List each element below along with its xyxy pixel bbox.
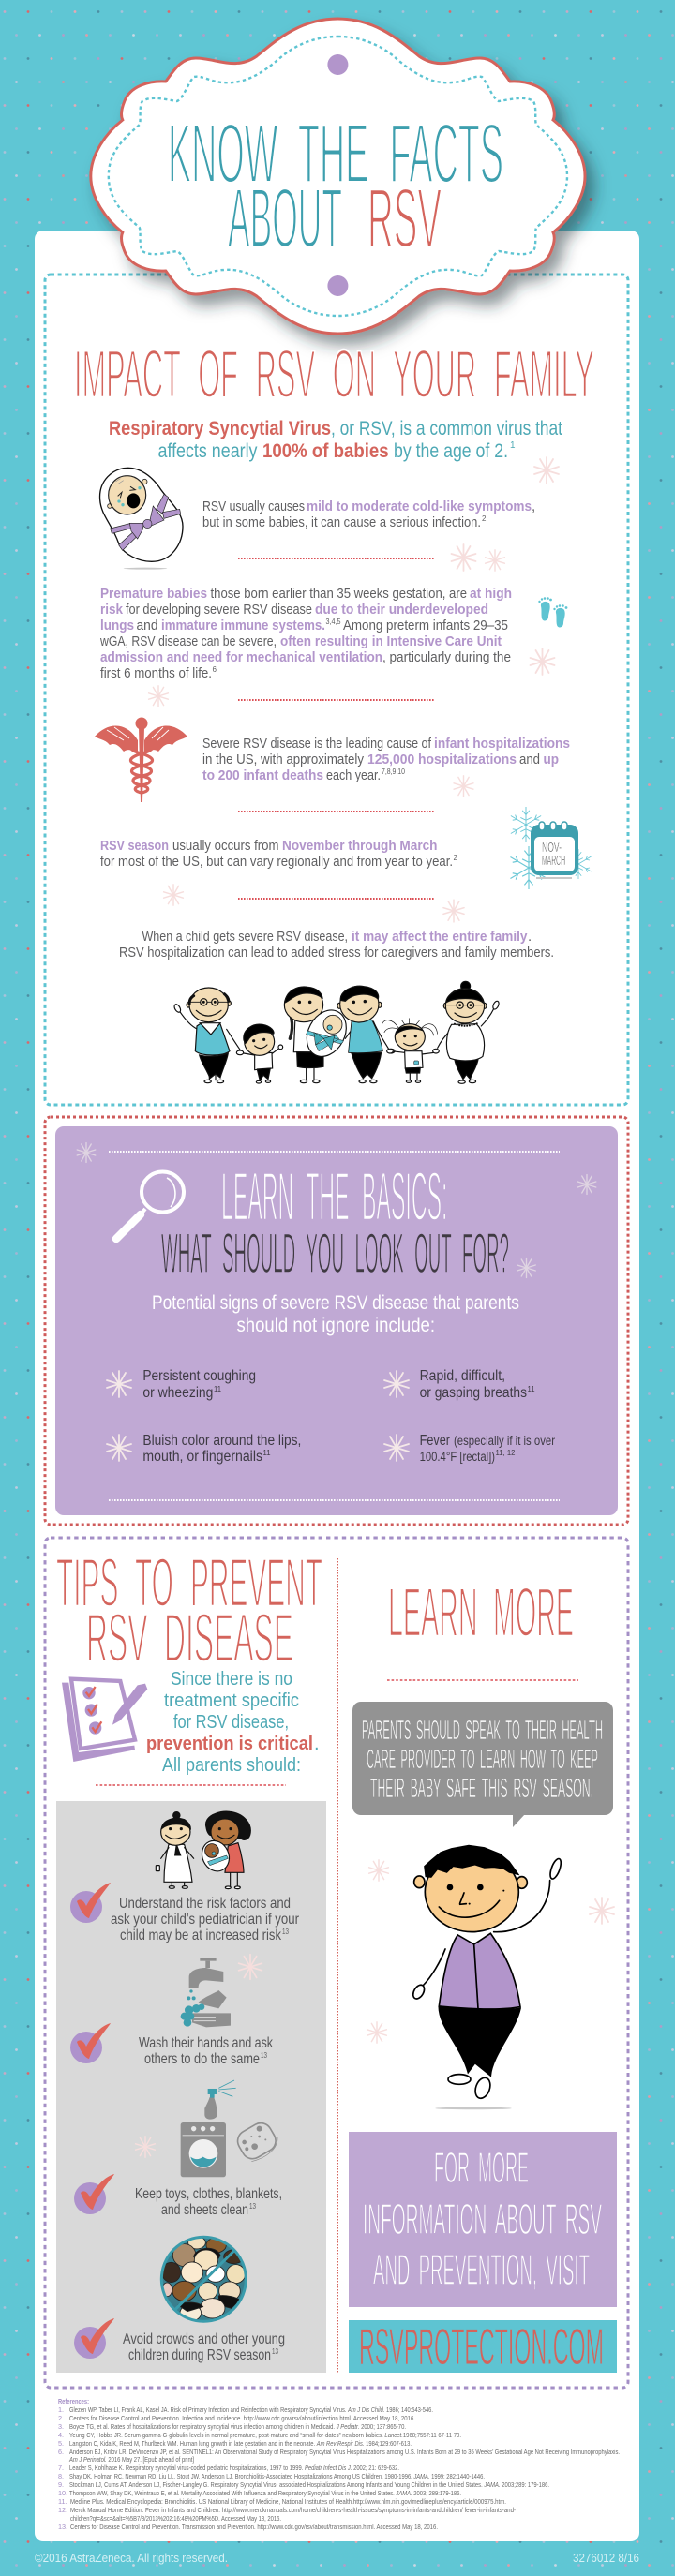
text: wash hands: Wash their hands and ask <box>139 2035 274 2051</box>
text: understand risk factors: 13 <box>282 1928 289 1936</box>
references: Shay DK, Holman RC, Newman RD, Liu LL, Stout JW, Anderson LJ. Bronchiolitis-Associated Hospitalizations Among US Children, 1980-1996. JAMA. 1999; 282:1440-1446. <box>69 2472 485 2480</box>
text: infant hospitalizations: Severe RSV disease is the leading cause of <box>202 736 432 752</box>
list of warning signs <box>107 1368 555 1465</box>
text: potential signs: should not ignore include: <box>236 1315 435 1336</box>
text: premature babies: Among preterm infants 29–35 <box>343 618 508 633</box>
text: affects the entire family: . <box>528 929 532 945</box>
text: premature babies: immature immune systems. <box>161 618 325 633</box>
grandmother <box>438 981 500 1083</box>
list of warning signs: 11 <box>214 1385 222 1393</box>
footer: job code: 3276012 8/16 <box>573 2551 639 2565</box>
references: 13. <box>58 2523 68 2531</box>
icon: winter calendar: MARCH <box>542 853 565 869</box>
references: Am J Perinatol. 2016 May 27. [Epub ahead of print] <box>68 2455 194 2464</box>
text: avoid crowds: Avoid crowds and other young <box>123 2331 285 2347</box>
text: prevention is critical: All parents should: <box>162 1755 301 1776</box>
references: 6. <box>58 2448 64 2456</box>
references: Stockman LJ, Curns AT, Anderson LJ, Fischer-Langley G. Respiratory Syncytial Virus- associated Hospitalizations Among Infants and Young Children in the United States. JAMA. 2003;289: 179-186. <box>69 2480 549 2489</box>
text: premature babies: risk <box>100 602 124 618</box>
list of warning signs: or gasping breaths <box>420 1385 527 1401</box>
text: premature babies: admission and need for mechanical ventilation <box>100 649 382 665</box>
list of warning signs: 100.4°F [rectal]) <box>420 1450 495 1464</box>
icon: checklist and pencil <box>62 1679 147 1762</box>
references: 4. <box>58 2431 64 2439</box>
list of warning signs: mouth, or fingernails <box>142 1449 262 1465</box>
text: keep clean: and sheets clean <box>161 2202 248 2218</box>
text: affects the entire family: it may affect the entire family <box>352 929 528 945</box>
text: premature babies: 6 <box>212 665 218 674</box>
references: Merck Manual Home Edition. Fever in Infants and Children. http://www.merckmanuals.com/home/children-s-health-issues/symptoms-in-infants-andchildren/ fever-in-infants-and- <box>70 2506 516 2514</box>
title: ABOUT <box>228 172 342 266</box>
text: RSV season: November through March <box>282 838 437 854</box>
text: wash hands: 13 <box>261 2051 267 2060</box>
family baby <box>299 1004 354 1064</box>
text: infant hospitalizations <box>202 736 570 783</box>
intro text: Respiratory Syncytial Virus <box>109 418 331 439</box>
mother <box>284 987 325 1083</box>
list of warning signs: 11 <box>527 1385 535 1393</box>
text: premature babies: 3,4,5 <box>326 618 341 626</box>
boy <box>236 1024 283 1083</box>
references: Yeung CY, Hobbs JR. Serum-gamma-G-globulin levels in normal premature, post-mature and “small-for-dates” newborn babies. Lancet.1968;7557:11 67-11 70. <box>69 2431 461 2439</box>
text: mild to moderate symptoms: 2 <box>482 514 487 523</box>
text: premature babies: those born earlier than 35 weeks gestation, are <box>210 586 467 602</box>
icon: crossed-out crowd <box>161 2237 246 2321</box>
references <box>58 2397 620 2531</box>
text: wash hands <box>139 2035 274 2067</box>
footer: copyright: ©2016 AstraZeneca. All rights reserved. <box>35 2551 228 2565</box>
list of warning signs: Rapid, difficult, <box>420 1368 505 1384</box>
title: RSV <box>368 172 442 266</box>
text: premature babies: Premature babies <box>100 586 207 602</box>
references: 7. <box>58 2464 64 2472</box>
text: keep clean: 13 <box>249 2202 256 2211</box>
intro text: affects nearly <box>158 440 258 462</box>
list of warning signs: 11, 12 <box>495 1449 516 1457</box>
girl <box>382 1019 439 1082</box>
divider <box>238 558 434 559</box>
panel: learn the basics dashed frame <box>45 1117 628 1525</box>
intro text: by the age of 2. <box>394 440 508 462</box>
panel: impact dashed frame <box>45 275 628 1105</box>
list of warning signs: (especially if it is over <box>454 1434 555 1448</box>
text: prevention is critical: . <box>314 1734 320 1754</box>
text: mild to moderate symptoms: but in some babies, it can cause a serious infection. <box>202 514 481 530</box>
references: 11. <box>58 2497 68 2506</box>
text: understand risk factors <box>111 1896 300 1943</box>
text: premature babies: often resulting in Intensive Care Unit <box>280 633 502 649</box>
panel: learn the basics <box>55 1126 618 1515</box>
icon: spray, washing machine and sponge <box>181 2080 279 2177</box>
speech bubble <box>352 1702 613 1827</box>
check mark <box>70 2023 111 2063</box>
list of warning signs: Bluish color around the lips, <box>142 1433 301 1449</box>
references: Medline Plus. Medical Encyclopedia: Bronchiolitis. US National Library of Medicine, National Institutes of Health.http://www.nlm.nih.gov/medlineplus/ency/article/000975.htm. <box>70 2497 506 2506</box>
references: Centers for Disease Control and Prevention. Transmission and Prevention. http://www.cdc.gov/rsv/about/transmission.html. Accessed May 18, 2016. <box>70 2523 438 2531</box>
text: RSV season: usually occurs from <box>172 838 279 854</box>
text: infant hospitalizations: up <box>544 752 559 767</box>
text: understand risk factors: ask your child’s pediatrician if your <box>111 1912 300 1928</box>
list of warning signs: Persistent coughing <box>142 1368 256 1384</box>
text: mild to moderate symptoms: RSV usually causes <box>202 499 305 514</box>
text: premature babies: first 6 months of life. <box>100 665 212 681</box>
divider <box>387 1679 578 1681</box>
list of warning signs: or wheezing <box>142 1385 213 1401</box>
title badge <box>91 19 585 334</box>
text: mild to moderate symptoms <box>202 499 535 530</box>
divider <box>238 699 434 701</box>
text: premature babies: wGA, RSV disease can be severe, <box>99 633 277 649</box>
text: avoid crowds: children during RSV season <box>128 2347 271 2363</box>
illustration: waving man <box>411 1845 563 2109</box>
references: 9. <box>58 2480 64 2489</box>
text: avoid crowds <box>123 2331 285 2363</box>
text: infant hospitalizations: each year. <box>326 767 381 783</box>
references: 3. <box>58 2422 64 2431</box>
panel: for more information: FOR MORE <box>434 2143 529 2192</box>
references: 8. <box>58 2472 64 2480</box>
text: mild to moderate symptoms: , <box>532 499 535 514</box>
references: Langston C, Kida K, Reed M, Thurlbeck WM. Human lung growth in late gestation and in the neonate. Am Rev Respir Dis. 1984;129:607-613. <box>69 2439 412 2448</box>
grandfather <box>173 988 242 1083</box>
references: Glezen WP, Taber LI, Frank AL, Kasel JA. Risk of Primary Infection and Reinfection with Respiratory Syncytial Virus. Am J Dis Child. 1986; 140:543-546. <box>69 2405 433 2414</box>
text: RSV season: 2 <box>454 854 458 862</box>
intro text: , or RSV, is a common virus that <box>331 418 562 439</box>
panel: for more information <box>349 2132 617 2307</box>
text: potential signs <box>152 1292 519 1336</box>
text: premature babies: and <box>137 618 158 633</box>
text: infant hospitalizations: infant hospitalizations <box>434 736 570 752</box>
references: References: <box>58 2397 89 2405</box>
text: mild to moderate symptoms: mild to moderate cold-like symptoms <box>307 499 532 514</box>
text: RSV season: RSV season <box>100 838 169 854</box>
text: premature babies <box>99 586 512 681</box>
divider <box>238 811 434 812</box>
text: affects the entire family: When a child gets severe RSV disease, <box>142 929 348 945</box>
decorative asterisks <box>149 457 614 2043</box>
text: premature babies: , particularly during the <box>382 649 511 665</box>
text: prevention is critical: for RSV disease, <box>173 1712 289 1733</box>
illustration: family <box>173 981 500 1083</box>
check mark <box>74 2318 114 2359</box>
icon: crying swaddled baby <box>100 468 183 570</box>
intro text: 100% of babies <box>262 440 389 462</box>
references: Centers for Disease Control and Prevention. Infection and Incidence. http://www.cdc.gov/rsv/about/infection.html. Accessed May 18, 2016. <box>69 2414 415 2422</box>
icon: tap and washing hands <box>181 1958 231 2027</box>
check mark <box>70 1883 111 1923</box>
icon: winter calendar <box>510 807 592 889</box>
references: 1. <box>58 2405 64 2414</box>
references: Boyce TG, et al. Rates of hospitalizations for respiratory syncytial virus infection among children in Medicaid. J Pediatr. 2000; 137:865-70. <box>69 2422 406 2431</box>
text: RSV season: for most of the US, but can vary regionally and from year to year. <box>100 854 453 870</box>
column divider <box>338 1558 339 2373</box>
text: affects the entire family: RSV hospitalization can lead to added stress for caregivers and family members. <box>119 945 554 960</box>
text: premature babies: due to their underdeveloped <box>315 602 488 618</box>
references: Leader S, Kohlhase K. Respiratory syncytial virus-coded pediatric hospitalizations, 1997 to 1999. Pediatr Infect Dis J. 2002; 21: 629-632. <box>69 2464 399 2472</box>
text: prevention is critical: prevention is critical <box>146 1734 313 1754</box>
text: understand risk factors: Understand the risk factors and <box>119 1896 291 1912</box>
icon: magnifying glass <box>116 1171 184 1239</box>
intro text: 1 <box>510 440 516 451</box>
text: infant hospitalizations: in the US, with approximately <box>202 752 364 767</box>
divider <box>238 898 434 900</box>
icon: caduceus <box>95 718 188 802</box>
references: 2. <box>58 2414 64 2422</box>
icon: winter calendar: NOV- <box>542 840 562 856</box>
panel: tips and learn more dashed frame <box>45 1538 628 2388</box>
text: potential signs: Potential signs of severe RSV disease that parents <box>152 1292 519 1314</box>
text: infant hospitalizations: 7,8,9,10 <box>382 767 405 776</box>
illustration: doctor and mother with baby <box>156 1811 250 1889</box>
text: infant hospitalizations: and <box>519 752 540 767</box>
text: infant hospitalizations: to 200 infant deaths <box>202 767 323 783</box>
heading: tips to prevent RSV disease <box>56 1545 322 1676</box>
text: premature babies: lungs <box>100 618 134 633</box>
references: children?qt=&sc=&alt=%5B7/8/2013%202:16:48%20PM%5D. Accessed May 18, 2016. <box>70 2514 281 2523</box>
references: 10. <box>58 2489 68 2497</box>
text: affects the entire family <box>119 929 554 960</box>
text: RSV season <box>100 838 458 870</box>
text: keep clean: Keep toys, clothes, blankets, <box>135 2186 282 2202</box>
text: prevention is critical: treatment specific <box>164 1690 299 1711</box>
list of warning signs: 11 <box>262 1449 271 1457</box>
list of warning signs: Fever <box>420 1433 450 1449</box>
text: understand risk factors: child may be at increased risk <box>120 1928 282 1943</box>
divider <box>96 1784 286 1786</box>
text: keep clean <box>135 2186 282 2218</box>
references: 12. <box>58 2506 68 2514</box>
text: infant hospitalizations: 125,000 hospitalizations <box>368 752 517 767</box>
text: RSV DISEASE <box>86 1601 293 1676</box>
references: Thompson WW, Shay DK, Weintraub E, et al. Mortality Associated With Influenza and Respiratory Syncytial Virus in the United States. JAMA. 2003; 289:179-186. <box>69 2489 461 2497</box>
check mark <box>74 2174 114 2214</box>
text: prevention is critical <box>146 1669 320 1776</box>
title <box>168 107 503 266</box>
icon: baby footprints <box>538 597 567 627</box>
references: 5. <box>58 2439 64 2448</box>
text: prevention is critical: Since there is no <box>171 1669 292 1690</box>
decorative asterisks <box>136 1955 262 2157</box>
panel: prevention steps <box>56 1801 326 2373</box>
father <box>338 986 395 1083</box>
text: wash hands: others to do the same <box>144 2051 260 2067</box>
text: premature babies: for developing severe RSV disease <box>126 602 312 618</box>
text: premature babies: at high <box>470 586 512 602</box>
text: avoid crowds: 13 <box>272 2347 278 2356</box>
intro text <box>109 418 562 462</box>
